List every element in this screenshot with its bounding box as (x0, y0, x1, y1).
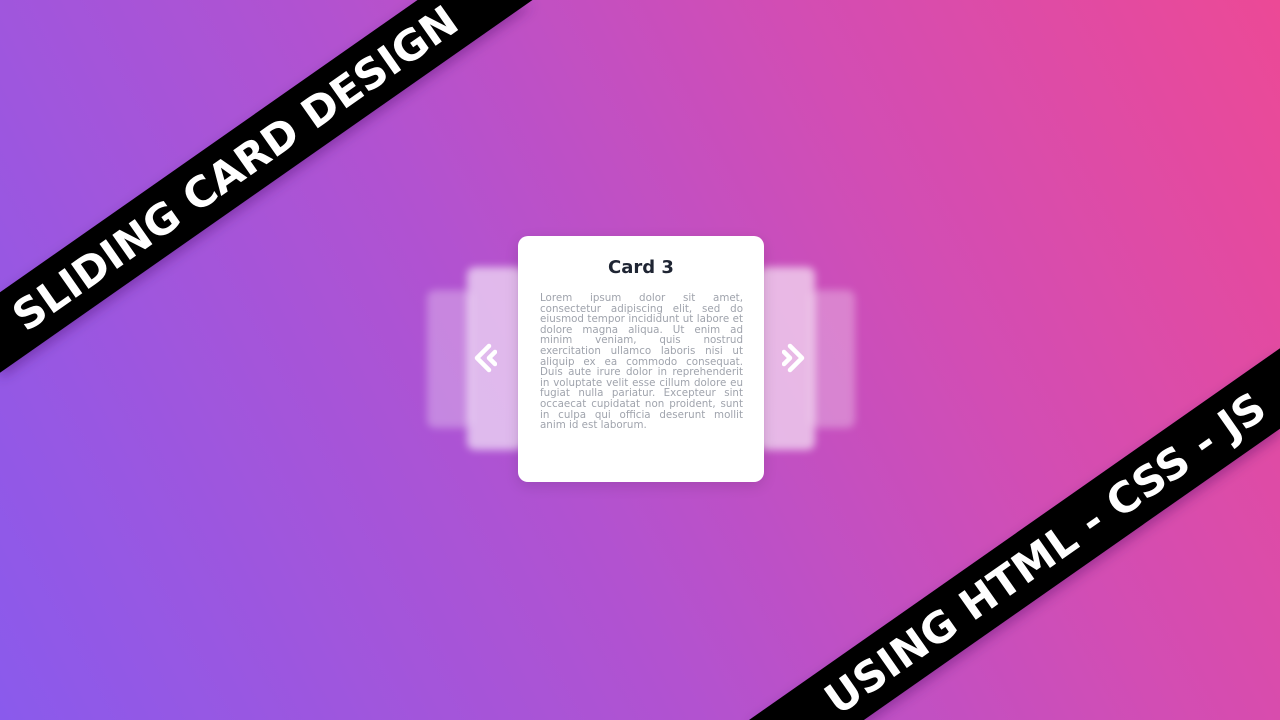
side card far left (427, 290, 472, 428)
card title: Card 3 (608, 257, 674, 278)
icon: right chevron (782, 344, 804, 372)
banner: using html css js: USING HTML - CSS - JS (816, 382, 1275, 720)
side card far right (810, 290, 855, 428)
card body text: Lorem ipsum dolor sit amet, consectetur adipiscing elit, sed do eiusmod tempor incididunt ut labore et dolore magna aliqua. Ut enim ad minim veniam, quis nostrud exercitation ullamco laboris nisi ut aliquip ex ea commodo consequat. Duis aute irure dolor in reprehenderit in voluptate velit esse cillum dolore eu fugiat nulla pariatur. Excepteur sint occaecat cupidatat non proident, sunt in culpa qui officia deserunt mollit anim id est laborum. (540, 292, 743, 431)
icon: left chevron (474, 344, 497, 372)
side card right (759, 267, 815, 450)
side card left (467, 267, 523, 450)
banner: sliding card design: SLIDING CARD DESIGN (4, 0, 467, 341)
main card (518, 236, 764, 482)
